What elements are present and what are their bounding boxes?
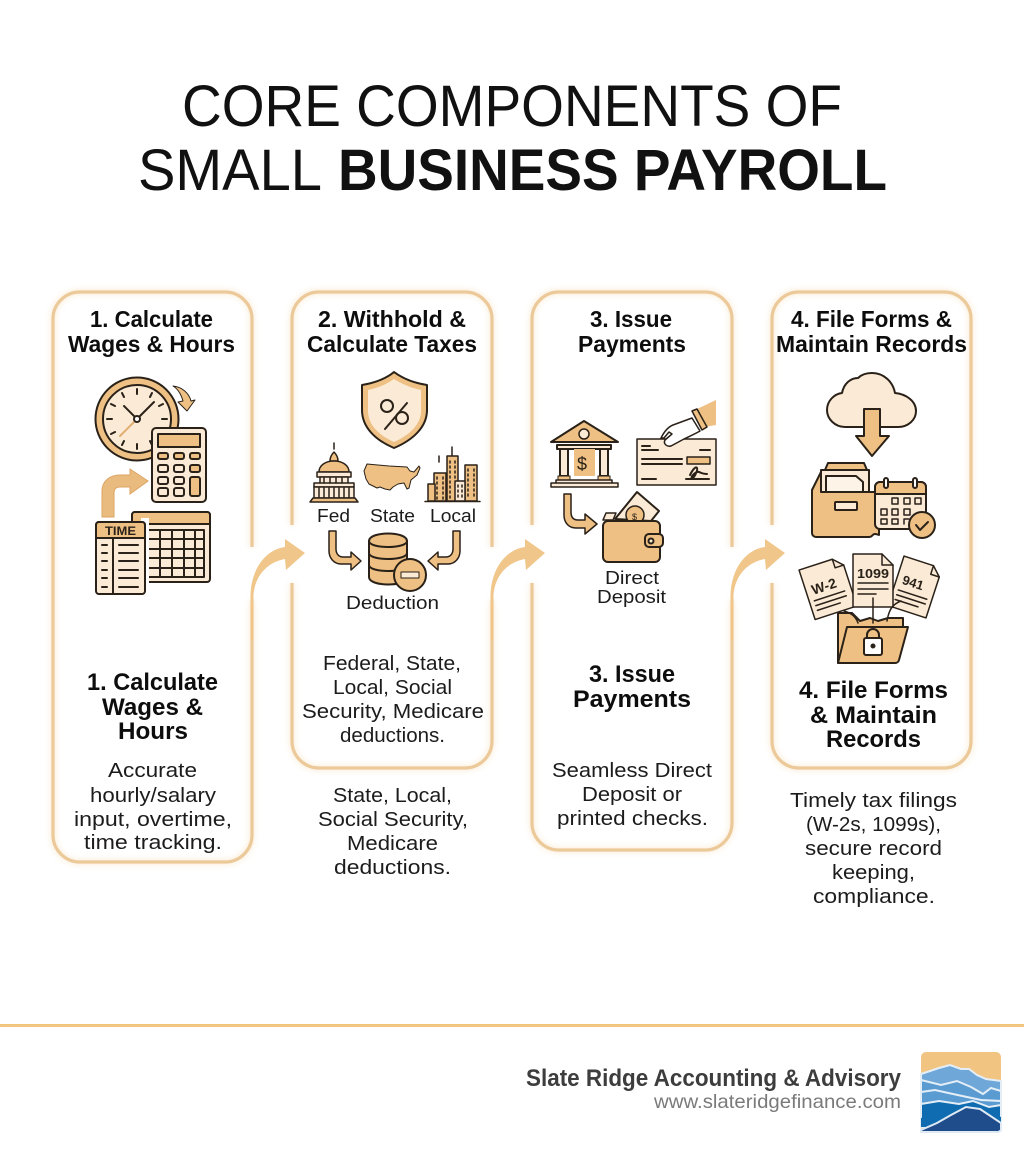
icon labels: fed state local: Fed: [317, 506, 350, 526]
panel 1 description: Accurate: [108, 760, 197, 782]
panel 4 subheading: Records: [826, 726, 921, 753]
icon: time sheet and table: [96, 512, 210, 594]
title: CORE COMPONENTS OF: [182, 74, 842, 139]
panel 2 description: Local, Social: [333, 677, 452, 699]
icon label: deduction: Deduction: [346, 593, 439, 613]
panel 1 subheading: Wages &: [102, 694, 203, 721]
panel 3 description: printed checks.: [557, 808, 708, 830]
panel 4 outside text: (W-2s, 1099s),: [806, 814, 941, 836]
icon: signed check with hand: [637, 400, 716, 485]
panel 1 frame: [53, 292, 252, 862]
icon: bank: [551, 421, 618, 487]
panel 1 subheading: [87, 669, 218, 745]
footer logo: mountain ridges: [921, 1052, 1001, 1132]
panel 1 heading: Wages & Hours: [68, 331, 235, 357]
panel 2 heading: Calculate Taxes: [307, 331, 477, 357]
panel 4 subheading: [799, 677, 948, 753]
panel 4 heading: [776, 306, 967, 357]
icon labels: fed state local: [317, 506, 476, 526]
footer: company name and url: Slate Ridge Accounting & Advisory: [526, 1065, 902, 1092]
panel 1 description: hourly/salary: [90, 785, 216, 807]
arrow: step 2 to step 3: [490, 539, 545, 640]
panel 1: calculate wages and hours: [53, 292, 252, 862]
icon: time sheet and table: TIME: [105, 524, 136, 538]
panel 4 outside text: secure record: [805, 838, 942, 860]
arrow: step 1 to step 2: [250, 539, 305, 640]
icon label: direct deposit: [597, 568, 666, 607]
panel 3 description: Seamless Direct: [552, 760, 712, 782]
panel 2 outside text: Social Security,: [318, 809, 468, 831]
panel 4 subheading: 4. File Forms: [799, 677, 948, 704]
icon: coin stack with minus: [369, 534, 426, 591]
icon: tax forms into locked folder: 1099: [857, 566, 889, 581]
icon: percent shield: [362, 372, 427, 448]
icon labels: fed state local: Local: [430, 506, 476, 526]
title: SMALL: [138, 138, 322, 203]
panel 2 frame: [292, 292, 492, 768]
icon: file box: [812, 463, 879, 537]
arrow: local to deduction: [428, 531, 460, 570]
panel 2 description: Security, Medicare: [302, 701, 484, 723]
panel 3 heading: Payments: [578, 331, 686, 357]
icon: us map: [364, 464, 420, 490]
panel 3 subheading: Payments: [573, 686, 691, 713]
footer: company name and url: www.slateridgefinance.com: [653, 1091, 901, 1113]
icon: wallet with cash: [603, 492, 663, 562]
panel 2 outside text: State, Local,: [333, 785, 452, 807]
panel 1 subheading: Hours: [118, 718, 188, 745]
panel 3 heading: 3. Issue: [590, 306, 672, 332]
icon label: direct deposit: Deposit: [597, 587, 666, 607]
panel 2 outside text: [318, 785, 468, 879]
panel 4: file forms and maintain records: [772, 292, 971, 908]
panel 3: issue payments: [532, 292, 732, 850]
icon labels: fed state local: State: [370, 506, 415, 526]
panel 1 heading: 1. Calculate: [90, 306, 213, 332]
arrow: time to calculator: [102, 469, 148, 517]
panel 4 outside text: compliance.: [813, 886, 935, 908]
icon: calendar with check: [875, 478, 935, 538]
panel 4 frame: [772, 292, 971, 768]
panel 4 subheading: & Maintain: [810, 702, 937, 729]
icon: wallet with cash: $: [632, 512, 637, 522]
title: [138, 74, 887, 203]
icon: calculator: [152, 428, 206, 502]
panel 3 frame: [532, 292, 732, 850]
panel 3 description: [552, 760, 712, 830]
icon label: direct deposit: Direct: [605, 568, 659, 588]
panel 3 description: Deposit or: [582, 784, 682, 806]
panel 4 heading: 4. File Forms &: [791, 306, 952, 332]
icon: city skyline: [425, 447, 480, 502]
panel 2 outside text: Medicare: [347, 833, 438, 855]
panel 4 outside text: keeping,: [832, 862, 915, 884]
icon: tax forms into locked folder: W-2: [809, 575, 839, 598]
panel 2 description: deductions.: [340, 725, 445, 747]
icon: bank: $: [577, 454, 587, 474]
panel 4 heading: Maintain Records: [776, 331, 967, 357]
panel 2 description: Federal, State,: [323, 653, 461, 675]
icon: clock: [96, 378, 195, 460]
panel 2 outside text: deductions.: [334, 857, 451, 879]
arrow: bank to wallet: [564, 494, 597, 534]
panel 1 description: time tracking.: [84, 832, 222, 854]
panel 4 outside text: [790, 790, 957, 908]
title: BUSINESS PAYROLL: [338, 138, 887, 203]
panel 2 heading: [307, 306, 477, 357]
icon: tax forms into locked folder: [799, 554, 942, 663]
panel 1 description: input, overtime,: [74, 809, 232, 831]
panel 3 subheading: 3. Issue: [589, 661, 675, 688]
icon: cloud download: [827, 373, 916, 456]
panel 1 heading: [68, 306, 235, 357]
panel 4 outside text: Timely tax filings: [790, 790, 957, 812]
icon: tax forms into locked folder: 941: [900, 572, 926, 593]
panel 2: withhold and calculate taxes: [292, 292, 492, 879]
panel 1 subheading: 1. Calculate: [87, 669, 218, 696]
panel 2 description: [302, 653, 484, 747]
panel 3 subheading: [573, 661, 691, 713]
arrow: federal to deduction: [329, 531, 361, 570]
icon: capitol: [310, 443, 358, 502]
arrow: step 3 to step 4: [730, 539, 785, 640]
footer: company name and url: [526, 1065, 902, 1113]
panel 1 description: [74, 760, 232, 854]
footer divider: [0, 1024, 1024, 1027]
panel 2 heading: 2. Withhold &: [318, 306, 466, 332]
panel 3 heading: [578, 306, 686, 357]
